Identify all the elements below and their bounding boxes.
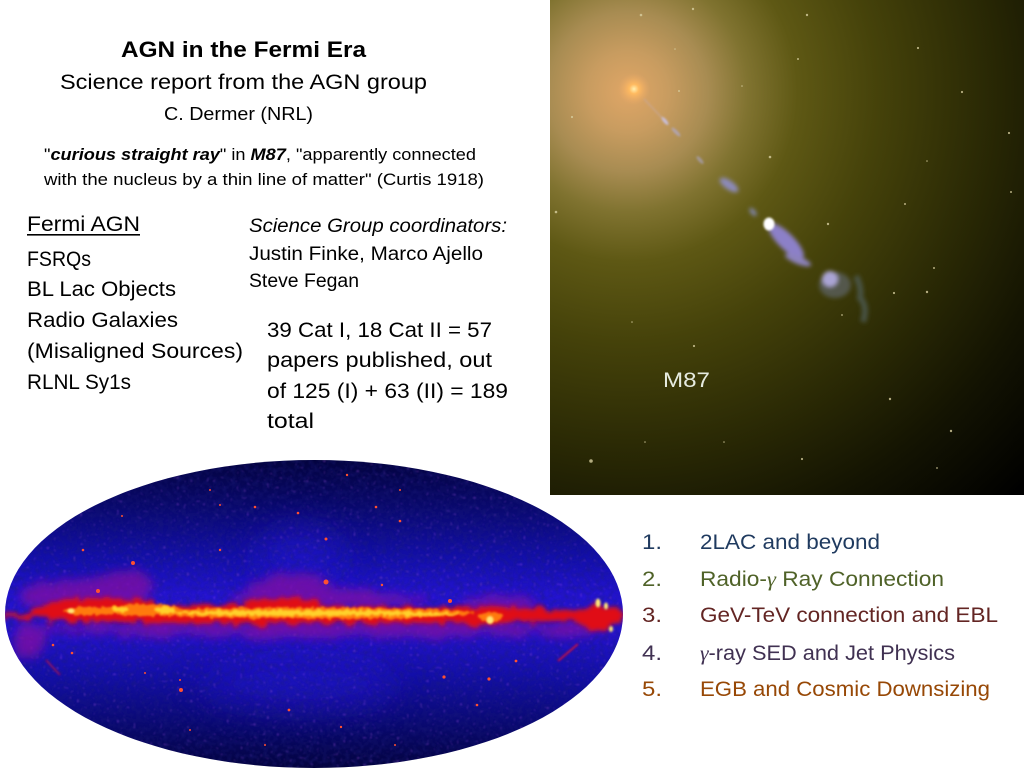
item 2: 2. (642, 566, 662, 591)
item 5: 5. (642, 676, 662, 701)
text block: science group coordinators: Steve Fegan (249, 271, 359, 292)
text block: paper counts: papers published, out (267, 347, 492, 372)
image: M87 galaxy with jet (550, 0, 1024, 495)
text block: Fermi AGN list: BL Lac Objects (27, 276, 176, 301)
item 4: 4. (642, 640, 662, 665)
text block: Curtis quote: with the nucleus by a thin line of matter" (Curtis 1918) (43, 170, 484, 189)
text block: Curtis quote (43, 145, 484, 189)
text block: Fermi AGN list: Radio Galaxies (27, 307, 178, 332)
item 3: 3. (642, 602, 662, 627)
author: C. Dermer (NRL) (164, 104, 313, 124)
text block: science group coordinators: Science Group coordinators: (249, 216, 507, 237)
text block: Fermi AGN list: Fermi AGN (27, 211, 140, 236)
numbered list: science topics (642, 529, 998, 701)
text block: science group coordinators (249, 216, 507, 292)
item 1: 1. (642, 529, 662, 554)
item 3: GeV-TeV connection and EBL (700, 602, 998, 627)
item 4: γ-ray SED and Jet Physics (700, 640, 955, 665)
label: M87: M87 (663, 368, 710, 392)
text block: Curtis quote: "curious straight ray " in M87, "apparently connected (44, 145, 476, 164)
item 1: 2LAC and beyond (700, 529, 880, 554)
text block: paper counts: total (267, 408, 314, 433)
image: Fermi gamma-ray all-sky map (0, 460, 630, 768)
title (60, 37, 427, 124)
text block: Fermi AGN list (27, 211, 243, 394)
text block: paper counts: of 125 (I) + 63 (II) = 189 (267, 378, 508, 403)
text block: Fermi AGN list: (Misaligned Sources) (27, 338, 243, 363)
text block: paper counts: 39 Cat I, 18 Cat II = 57 (267, 317, 492, 342)
item 2: Radio-γ Ray Connection (700, 566, 944, 591)
heading: AGN in the Fermi Era: AGN in the Fermi Era (121, 37, 367, 62)
item 5: EGB and Cosmic Downsizing (700, 676, 990, 701)
text block: Fermi AGN list: RLNL Sy1s (27, 369, 131, 394)
text block: science group coordinators: Justin Finke, Marco Ajello (249, 244, 483, 265)
text block: paper counts (267, 317, 508, 433)
text block: Fermi AGN list: FSRQs (27, 246, 91, 271)
subtitle: Science report from the AGN group (60, 69, 427, 94)
